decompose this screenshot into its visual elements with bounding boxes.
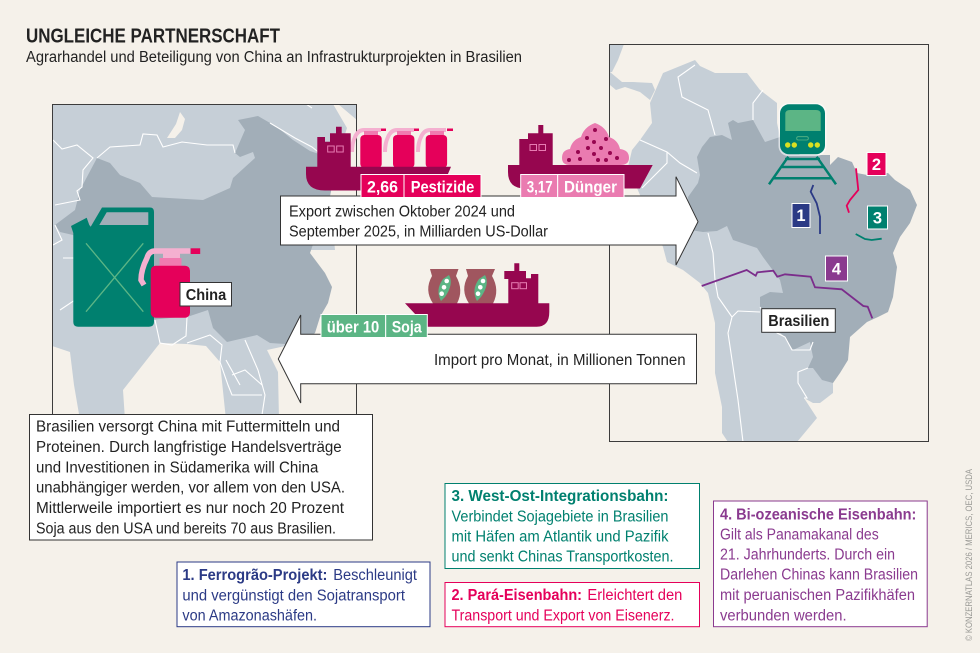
callout: 2 Pará: 2. Pará-Eisenbahn:	[452, 587, 582, 604]
label: China	[180, 282, 232, 306]
text block: intro: Brasilien versorgt China mit Futtermitteln und	[36, 419, 340, 436]
callout: 3 West-Ost: Verbindet Sojagebiete in Brasilien	[452, 509, 668, 526]
ship with pesticides	[306, 127, 453, 190]
export arrow: September 2025, in Milliarden US-Dollar	[289, 224, 548, 241]
marker 1: 1	[796, 207, 806, 225]
marker 4	[826, 256, 848, 281]
marker 2	[867, 152, 886, 176]
callout: 4 Bi-ozeanische: Gilt als Panamakanal des	[720, 526, 879, 543]
label: fertilizer value: Dünger	[564, 178, 618, 196]
export arrow	[280, 177, 698, 265]
text block: intro	[30, 414, 372, 540]
text block: intro: Proteinen. Durch langfristige Handelsverträge	[36, 439, 342, 456]
frame: Brazil map	[610, 44, 928, 442]
subtitle: Agrarhandel und Beteiligung von China an Infrastrukturprojekten in Brasilien	[26, 49, 522, 66]
title: UNGLEICHE PARTNERSCHAFT	[26, 26, 280, 48]
icon: jerrycan	[71, 208, 154, 327]
callout: 1 Ferrogrão: und vergünstigt den Sojatransport	[182, 588, 406, 605]
icon: pesticide spray bottle	[141, 248, 200, 318]
marker 1	[792, 204, 810, 228]
callout: 4 Bi-ozeanische: verbunden werden.	[720, 608, 847, 625]
callout: 3 West-Ost	[445, 484, 700, 568]
marker 3	[868, 206, 888, 229]
callout: 1 Ferrogrão	[177, 562, 430, 627]
callout: 4 Bi-ozeanische: 21. Jahrhunderts. Durch ein	[720, 546, 895, 563]
import arrow	[278, 315, 696, 403]
callout: 3 West-Ost: mit Häfen am Atlantik und Pazifik	[452, 529, 669, 546]
label: soy value: über 10	[327, 319, 379, 337]
import arrow: Import pro Monat, in Millionen Tonnen	[434, 352, 686, 369]
export arrow: Export zwischen Oktober 2024 und	[289, 204, 515, 221]
label: fertilizer value	[521, 174, 624, 198]
callout: 2 Pará: Erleichtert den	[587, 587, 682, 604]
marker 2: 2	[872, 156, 881, 174]
callout: 2 Pará	[445, 582, 700, 627]
label: China: China	[186, 287, 227, 304]
ship with fertilizer	[508, 123, 653, 188]
label: soy value	[321, 314, 427, 338]
label: pesticides value	[361, 174, 481, 198]
marker 3: 3	[873, 210, 882, 228]
callout: 1 Ferrogrão: 1. Ferrogrão-Projekt:	[182, 567, 327, 584]
callout: 3 West-Ost: und senkt Chinas Transportkosten.	[452, 549, 674, 566]
callout: 4 Bi-ozeanische: Darlehen Chinas kann Brasilien	[720, 566, 918, 583]
source credit: © KONZERNATLAS 2026 / MERICS, OEC, USDA	[964, 469, 974, 641]
text block: intro: und Investitionen in Südamerika will China	[36, 460, 319, 476]
callout: 4 Bi-ozeanische: mit peruanischen Pazifikhäfen	[720, 587, 915, 604]
label: soy value: Soja	[392, 319, 422, 337]
icon: train on tracks	[769, 103, 836, 184]
text block: intro: Soja aus den USA und bereits 70 aus Brasilien.	[36, 520, 336, 537]
map: South America with Brazil	[610, 44, 928, 442]
label: Brasilien	[762, 309, 835, 332]
callout: 4 Bi-ozeanische: 4. Bi-ozeanische Eisenbahn:	[720, 506, 916, 523]
ship with soy sacks	[405, 263, 549, 327]
callout: 2 Pará: Transport und Export von Eisenerz.	[452, 608, 674, 625]
text block: intro: unabhängiger werden, vor allem von den USA.	[36, 480, 345, 497]
callout: 1 Ferrogrão: Beschleunigt	[333, 567, 418, 584]
label: pesticides value: Pestizide	[411, 178, 474, 196]
text block: intro: Mittlerweile importiert es nur noch 20 Prozent	[36, 500, 345, 517]
label: pesticides value: 2,66	[367, 178, 398, 196]
callout: 1 Ferrogrão: von Amazonashäfen.	[182, 608, 317, 625]
label: Brasilien: Brasilien	[768, 313, 829, 330]
marker 4: 4	[832, 260, 842, 278]
callout: 3 West-Ost: 3. West-Ost-Integrationsbahn:	[452, 488, 668, 505]
map: China and neighbours	[52, 104, 357, 420]
railway lines on the map	[702, 168, 882, 318]
callout: 4 Bi-ozeanische	[714, 501, 927, 627]
frame: China map	[52, 104, 356, 416]
label: fertilizer value: 3,17	[527, 178, 553, 196]
